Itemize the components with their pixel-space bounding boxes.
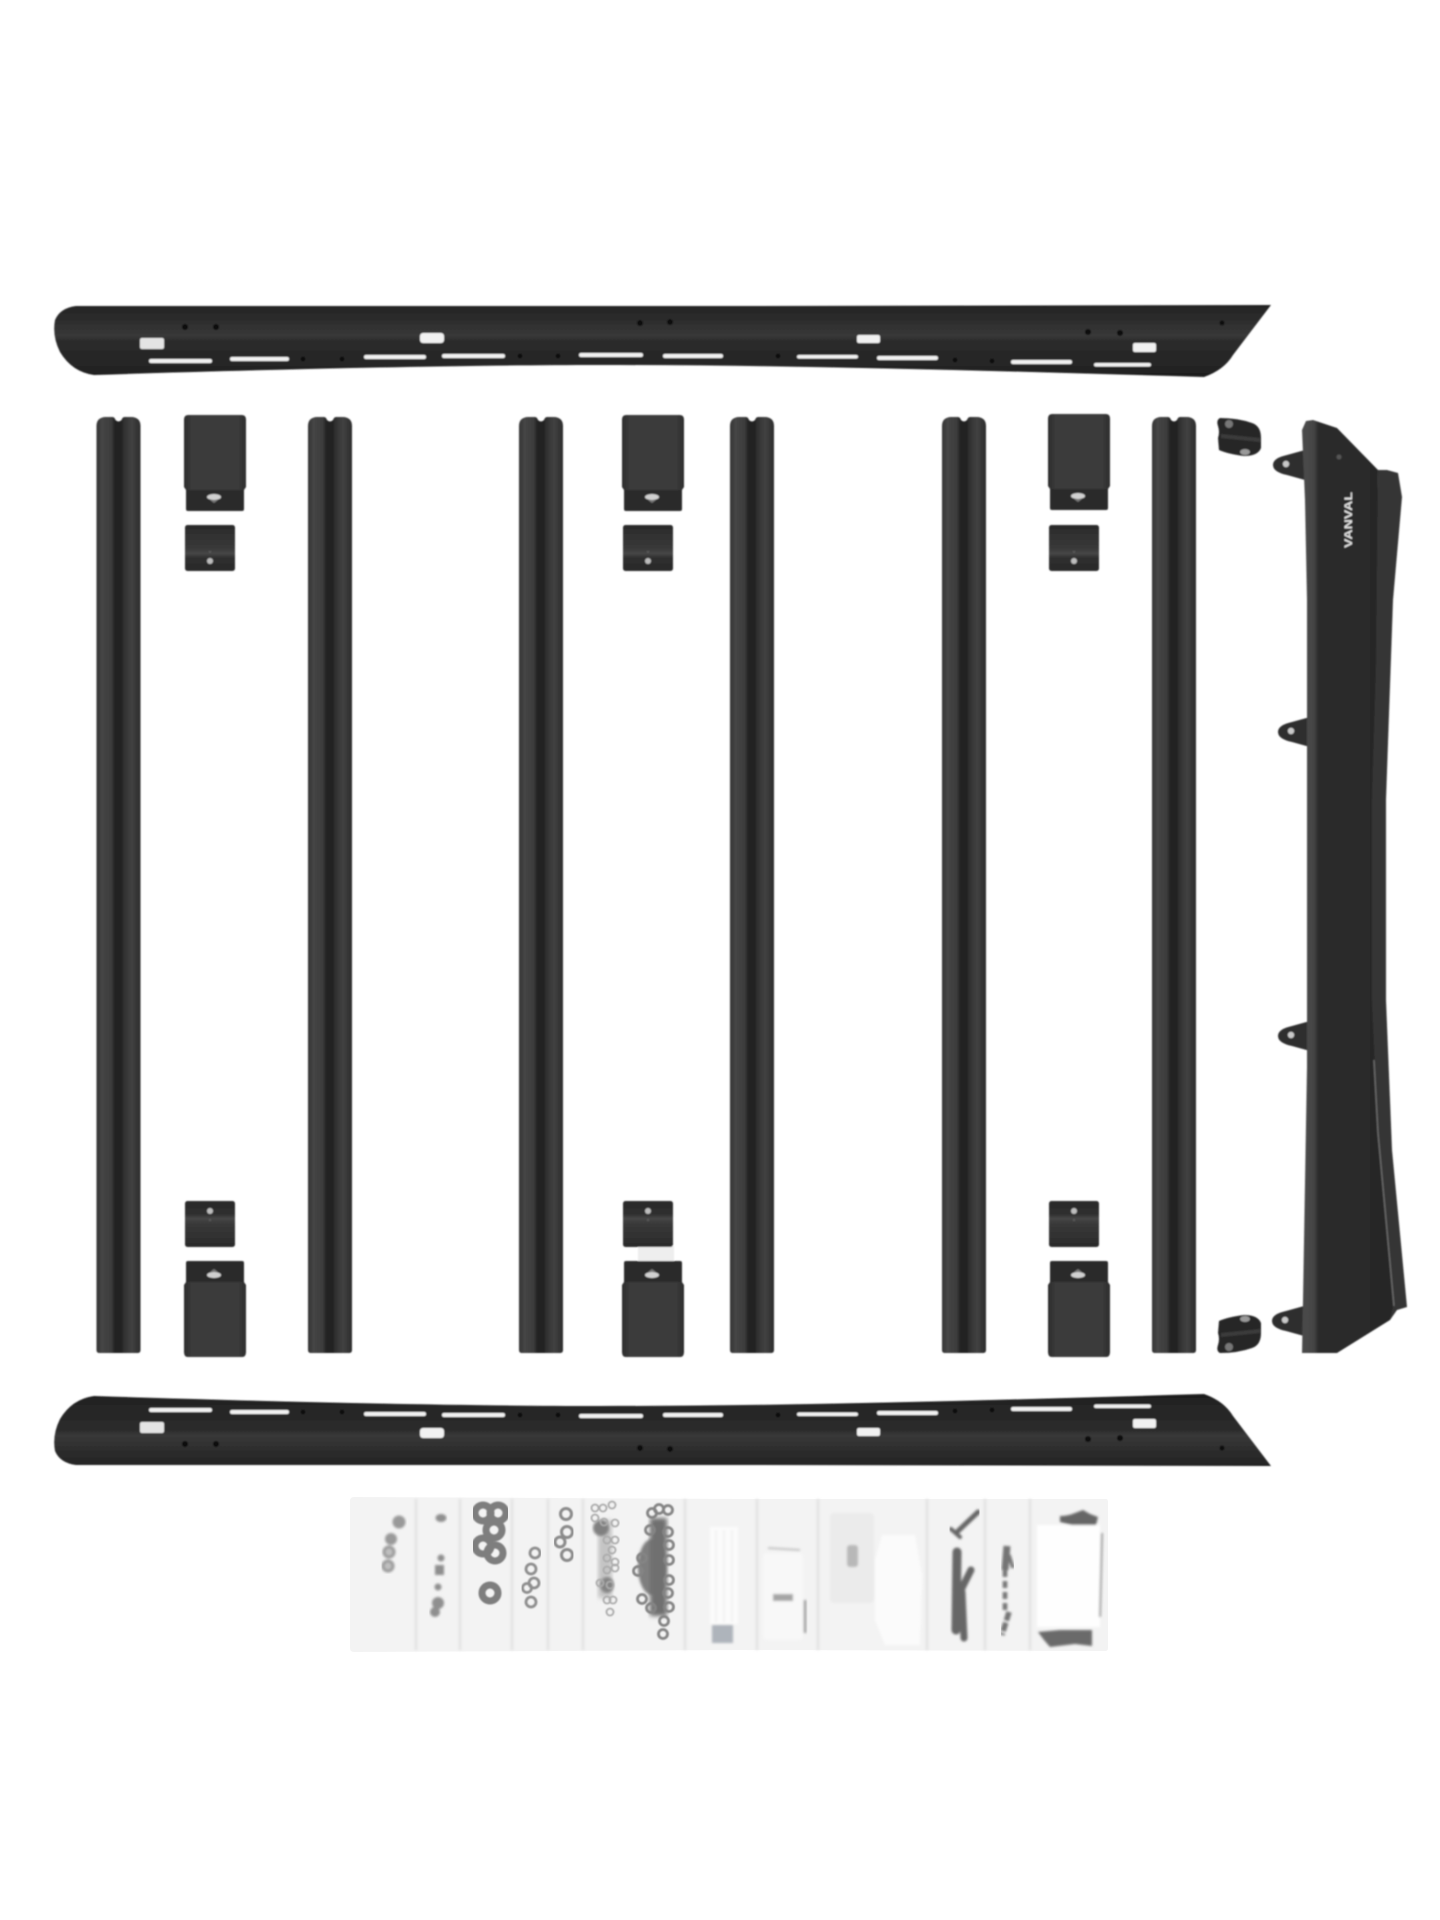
side rail: bottom bbox=[54, 1394, 1271, 1466]
fairing flange bbox=[1370, 470, 1407, 1320]
pocket: small rings cluster bbox=[592, 1502, 618, 1616]
pocket: medium rings bbox=[522, 1548, 540, 1607]
front wind fairing bbox=[1272, 420, 1407, 1353]
pocket seams bbox=[416, 1499, 1030, 1650]
side rail: top bbox=[54, 305, 1271, 377]
crossbar 5 bbox=[942, 417, 986, 1353]
pocket: white card with fasteners bbox=[1037, 1510, 1102, 1647]
bag background bbox=[350, 1497, 1108, 1652]
pocket: small screws bbox=[1002, 1546, 1013, 1635]
pocket: rings bbox=[555, 1508, 572, 1560]
end clamp: top bbox=[1217, 418, 1261, 456]
mounting brackets: bottom left bbox=[184, 1201, 246, 1357]
crossbar 2 bbox=[308, 417, 352, 1353]
mounting brackets: bottom right bbox=[1048, 1201, 1110, 1357]
pocket: small washers bbox=[383, 1516, 406, 1571]
fairing body bbox=[1302, 420, 1393, 1353]
crossbar 4 bbox=[730, 417, 774, 1353]
fairing hole bbox=[1336, 454, 1342, 460]
pocket: pad with slot bbox=[763, 1548, 805, 1640]
crossbar 6 bbox=[1152, 417, 1196, 1353]
mounting brackets: top right bbox=[1048, 414, 1110, 571]
pocket: large washers bbox=[475, 1505, 506, 1601]
fairing logo: VANVAL bbox=[1343, 492, 1355, 548]
fairing highlight line bbox=[1374, 1060, 1394, 1306]
pocket: bolts bbox=[951, 1512, 978, 1638]
crossbar 3 bbox=[519, 417, 563, 1353]
mounting brackets: top left bbox=[184, 415, 246, 571]
mounting brackets: top middle bbox=[622, 415, 684, 571]
end clamp: bottom bbox=[1217, 1315, 1261, 1353]
mounting brackets: bottom middle bbox=[622, 1201, 684, 1357]
pocket: nuts bbox=[430, 1514, 446, 1617]
pocket: cable ties bbox=[710, 1527, 738, 1643]
hardware bag bbox=[350, 1497, 1108, 1652]
fairing tabs bbox=[1272, 450, 1310, 1336]
pocket: rubber pads bbox=[830, 1513, 922, 1645]
pocket: dense washers cluster bbox=[634, 1504, 674, 1638]
crossbar 1 bbox=[96, 417, 140, 1353]
